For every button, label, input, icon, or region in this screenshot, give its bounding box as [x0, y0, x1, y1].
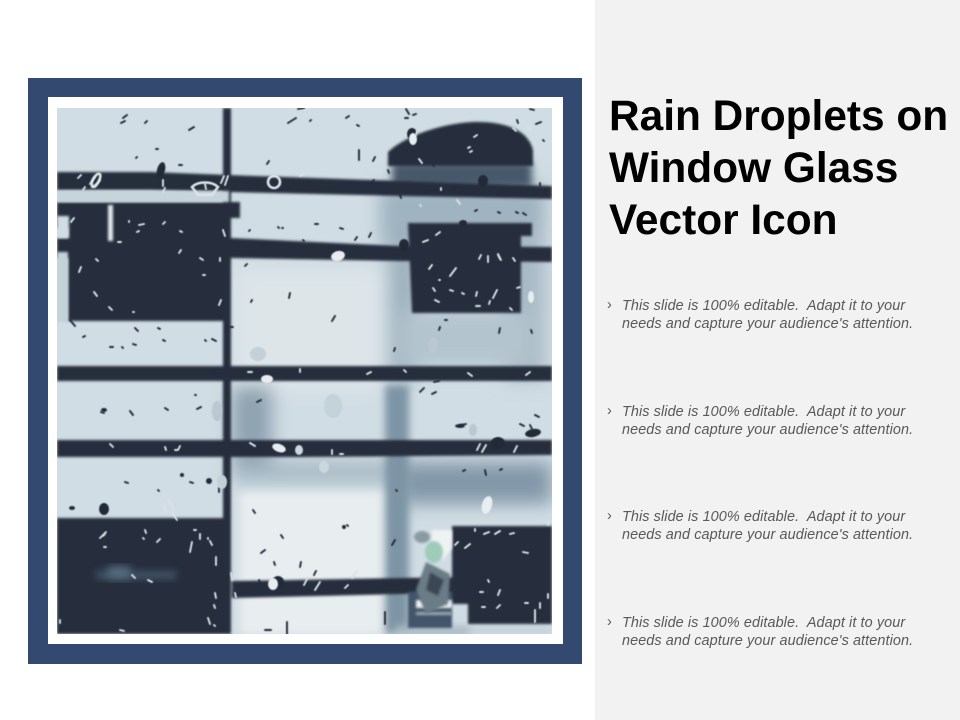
blurred dark windows and bars	[57, 108, 552, 634]
bullet text 3: needs and capture your audience's attention.	[622, 527, 913, 543]
bullet text 2: This slide is 100% editable. Adapt it to your	[622, 404, 905, 420]
panel: grey sidebar	[595, 0, 960, 720]
bullet text 1: This slide is 100% editable. Adapt it to your	[622, 298, 905, 314]
bullet text 3	[607, 508, 913, 543]
light strips in dark windows	[57, 191, 452, 615]
title: Vector Icon	[609, 196, 838, 243]
bullet text 1: ›	[607, 297, 612, 313]
title: Rain Droplets on	[609, 92, 948, 139]
bullet text 2: needs and capture your audience's attention.	[622, 422, 913, 438]
bullet text 2	[607, 403, 913, 438]
faint blue glow in lower left window	[96, 566, 176, 580]
bullet text 1	[607, 297, 913, 332]
bullet text 4: ›	[607, 614, 612, 630]
bullet text 1: needs and capture your audience's attention.	[622, 316, 913, 332]
ring droplets on the top bar	[90, 172, 280, 195]
pale water drops	[212, 133, 534, 590]
photo: rain droplets on window glass	[57, 108, 552, 634]
bullet text 3: This slide is 100% editable. Adapt it to your	[622, 509, 905, 525]
droplet: green reflection	[414, 530, 452, 614]
panel: white picture mat	[48, 97, 563, 644]
bullet text 3: ›	[607, 508, 612, 524]
large dark drops	[69, 128, 542, 588]
panel: blue picture frame	[28, 78, 582, 664]
dark droplets and streaks on glass	[70, 108, 544, 634]
bullet text 2: ›	[607, 403, 612, 419]
blurred grey building shading	[232, 185, 552, 504]
bullet text 4	[607, 614, 913, 649]
bullet text 4: needs and capture your audience's attention.	[622, 633, 913, 649]
bullet text 4: This slide is 100% editable. Adapt it to your	[622, 615, 905, 631]
glass background	[57, 108, 552, 634]
light droplets on dark areas	[60, 126, 548, 631]
title: Window Glass	[609, 144, 898, 191]
title	[609, 92, 948, 243]
